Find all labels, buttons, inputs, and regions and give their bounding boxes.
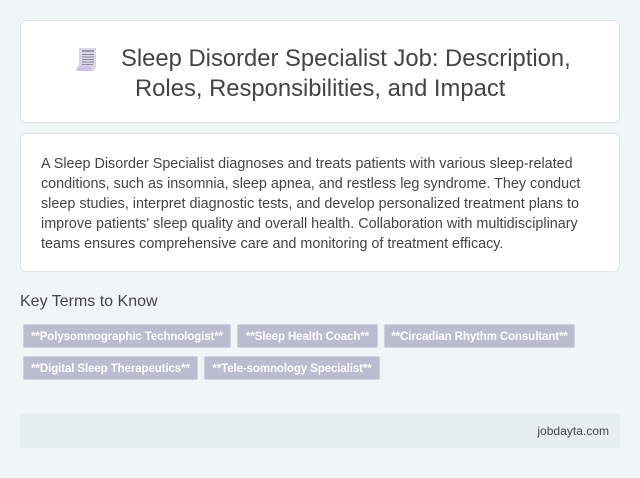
heading: key terms: Key Terms to Know xyxy=(20,293,158,310)
description text: conditions, such as insomnia, sleep apnea, and restless leg syndrome. They conduct xyxy=(41,176,580,192)
title xyxy=(121,45,571,102)
tag 3: **Circadian Rhythm Consultant** xyxy=(391,331,568,343)
tag 1: **Polysomnographic Technologist** xyxy=(31,331,223,343)
tag 2 xyxy=(237,324,378,348)
title: Sleep Disorder Specialist Job: Description, xyxy=(121,45,571,72)
footer xyxy=(20,414,620,448)
panel: title card xyxy=(20,20,620,123)
icon: document scroll xyxy=(76,48,96,71)
description text: improve patients' sleep quality and overall health. Collaboration with multidisciplinary xyxy=(41,216,578,232)
tag 4: **Digital Sleep Therapeutics** xyxy=(31,363,190,375)
tag 5 xyxy=(204,356,380,380)
tag 2: **Sleep Health Coach** xyxy=(246,331,369,343)
tag 3 xyxy=(384,324,575,348)
description text xyxy=(41,156,580,252)
description text: sleep studies, interpret diagnostic tests, and develop personalized treatment plans to xyxy=(41,196,579,212)
tag 5: **Tele-somnology Specialist** xyxy=(212,363,372,375)
title: Roles, Responsibilities, and Impact xyxy=(135,75,505,102)
footer site name: jobdayta.com xyxy=(537,424,609,438)
description text: A Sleep Disorder Specialist diagnoses and treats patients with various sleep-related xyxy=(41,156,573,172)
panel: description xyxy=(20,133,620,272)
tag 4 xyxy=(23,356,198,380)
description text: teams ensures comprehensive care and monitoring of treatment efficacy. xyxy=(41,236,503,252)
tag 1 xyxy=(23,324,231,348)
